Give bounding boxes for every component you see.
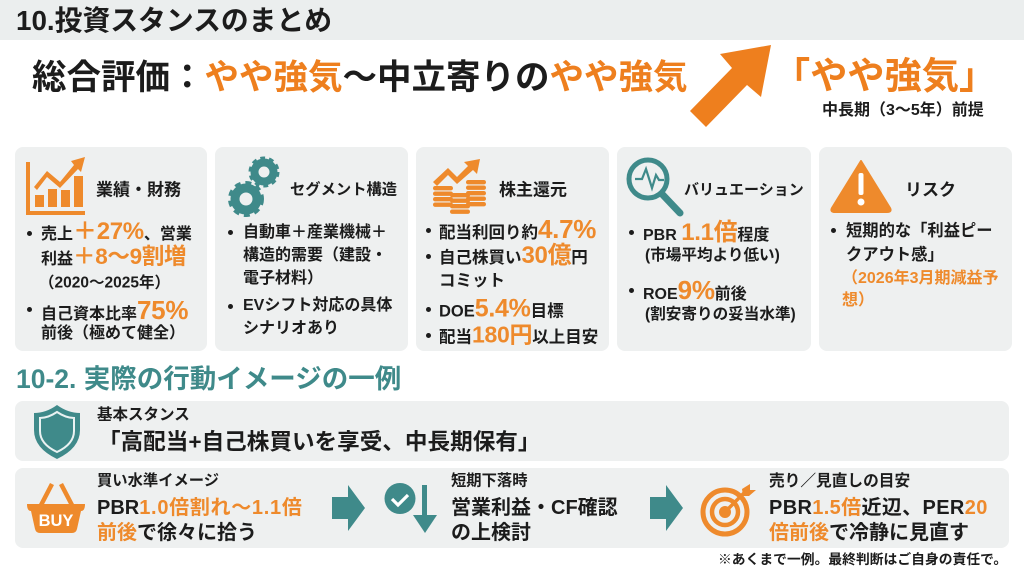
bullets: segment structure	[228, 223, 392, 337]
bullets: risk: （2026年3月期減益予	[842, 270, 998, 287]
icon: shield	[34, 405, 80, 459]
label: basic stance: 基本スタンス	[97, 406, 190, 423]
bullets: segment structure: シナリオあり	[243, 320, 339, 337]
bullets: business and financials: （2020〜2025年）	[39, 274, 170, 291]
heading: valuation: バリュエーション	[684, 182, 804, 198]
panel: action flow	[15, 468, 1009, 548]
header band	[0, 0, 1024, 40]
icon: warning triangle	[830, 160, 892, 213]
icon: growth chart	[26, 157, 85, 215]
text: sell guideline: PBR1.5倍近辺、PER20	[769, 497, 988, 519]
bullets: valuation: (市場平均より低い)	[645, 247, 780, 264]
bullets: shareholder returns: DOE5.4%目標	[439, 294, 564, 322]
overall rating headline: 総合評価：やや強気〜中立寄りのやや強気	[32, 59, 688, 97]
bullets: risk	[831, 222, 998, 309]
bullets: shareholder returns: 自己株買い30億円	[439, 242, 588, 269]
icon: buy basket: BUY	[39, 512, 73, 530]
text: 倍前後で冷静に見直す	[769, 522, 969, 544]
icon: buy basket	[27, 483, 85, 533]
bullets: valuation: (割安寄りの妥当水準)	[645, 306, 796, 323]
stance statement: 「高配当+自己株買いを享受、中長期保有」	[98, 430, 540, 455]
panel: valuation	[617, 147, 811, 351]
bullets: segment structure: 構造的需要（建設・	[243, 247, 387, 264]
bullets: business and financials: 前後（極めて健全）	[41, 325, 185, 342]
icon: check and down arrow	[384, 483, 437, 533]
section heading: 10-2. 実際の行動イメージの一例	[16, 364, 401, 394]
icon: magnifier with pulse	[626, 158, 684, 216]
label: buy level: 買い水準イメージ	[97, 472, 219, 489]
heading: business and financials: 業績・財務	[96, 180, 181, 200]
panel: risk	[819, 147, 1012, 351]
heading: shareholder returns: 株主還元	[499, 180, 567, 200]
bullets: shareholder returns: 配当利回り約4.7%	[439, 214, 596, 244]
text: 前後で徐々に拾う	[97, 522, 257, 544]
bullets: shareholder returns: 配当180円以上目安	[439, 322, 598, 348]
panel: basic stance	[15, 401, 1009, 461]
bullets: segment structure: EVシフト対応の具体	[243, 297, 392, 314]
text: short-term dip: 営業利益・CF確認	[451, 497, 618, 519]
icon: gears	[228, 156, 280, 217]
icon: coins and up arrow	[433, 159, 486, 214]
header title: 10.投資スタンスのまとめ	[16, 5, 332, 36]
bullets: valuation: PBR 1.1倍程度	[643, 219, 769, 246]
arrow: buy to dip	[332, 485, 365, 531]
bullets: business and financials	[27, 218, 192, 342]
bullets: valuation	[629, 219, 796, 323]
panel: shareholder returns	[416, 147, 609, 351]
label: sell guideline: 売り／見直しの目安	[769, 473, 910, 490]
panel: business and financials	[15, 147, 207, 351]
text: の上検討	[451, 522, 531, 544]
panel: segment structure	[215, 147, 408, 351]
bullets: risk: 短期的な「利益ピー	[846, 222, 993, 240]
footnote: ※あくまで一例。最終判断はご自身の責任で。	[718, 552, 1007, 567]
bullets: shareholder returns	[426, 214, 598, 348]
label: short-term dip: 短期下落時	[451, 472, 528, 489]
icon: big up arrow	[690, 45, 771, 127]
icon: target	[700, 484, 756, 536]
bullets: shareholder returns: コミット	[439, 272, 505, 290]
bullets: business and financials: 自己資本比率75%	[41, 295, 188, 325]
bullets: risk: クアウト感」	[846, 246, 944, 264]
bullets: business and financials: 利益＋8〜9割増	[41, 244, 186, 269]
bullets: segment structure: 自動車＋産業機械＋	[243, 224, 387, 241]
horizon note: 中長期（3〜5年）前提	[822, 102, 984, 119]
heading: risk: リスク	[905, 180, 956, 200]
bullets: valuation: ROE9%前後	[643, 275, 747, 305]
bullets: segment structure: 電子材料）	[243, 270, 323, 287]
bullets: risk: 想）	[842, 292, 874, 309]
bullets: business and financials: 売上＋27%、営業	[41, 218, 192, 245]
heading: segment structure: セグメント構造	[290, 181, 397, 198]
rating callout: 「やや強気」	[773, 54, 996, 96]
arrow: dip to sell	[650, 485, 683, 531]
text: buy level: PBR1.0倍割れ〜1.1倍	[97, 497, 303, 519]
